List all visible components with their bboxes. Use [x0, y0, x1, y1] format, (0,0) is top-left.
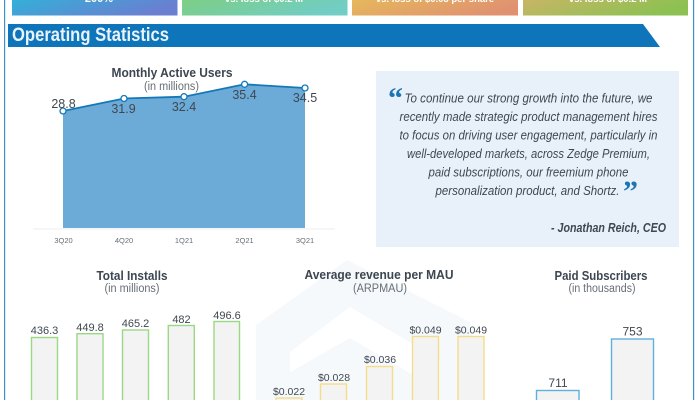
quote text: well-developed markets, across Zedge Premium,: [407, 147, 650, 161]
bars: [32, 322, 240, 400]
chart title: (in millions): [144, 81, 199, 93]
bars: [276, 336, 484, 400]
quote text: To continue our strong growth into the future, we: [404, 92, 653, 106]
data labels: 482: [172, 314, 191, 326]
quote text: to focus on driving user engagement, particularly in: [400, 128, 658, 142]
chart title: (in thousands): [568, 283, 636, 295]
data labels: $0.022: [273, 386, 305, 398]
chart title: (ARPMAU): [353, 283, 407, 295]
watermark logo: [256, 260, 484, 400]
chart title: Monthly Active Users: [112, 65, 232, 80]
card: EPS: [352, 0, 518, 16]
quote text: personalization product, and Shortz.: [435, 184, 620, 198]
data labels: 31.9: [111, 102, 136, 116]
data labels: $0.049: [455, 324, 487, 336]
axis labels: [54, 236, 314, 245]
section banner: Operating Statistics: [8, 24, 660, 47]
chart title: Total Installs: [96, 268, 168, 283]
data labels: 28.8: [51, 97, 76, 111]
axis labels: 1Q21: [175, 236, 193, 245]
icon: closing quote: ”: [623, 175, 638, 208]
axis labels: 3Q21: [296, 236, 314, 245]
data labels: 34.5: [293, 91, 317, 105]
data labels: 436.3: [31, 325, 58, 337]
chart title: [96, 268, 168, 295]
quote text: paid subscriptions, our freemium phone: [428, 166, 629, 180]
data labels: $0.036: [364, 354, 396, 366]
data labels: 711: [548, 376, 568, 390]
card: adjusted EBITDA: [523, 0, 688, 16]
chart title: (in millions): [104, 283, 160, 295]
data labels: 465.2: [122, 318, 149, 330]
chart title: [112, 65, 232, 93]
data labels: 35.4: [232, 88, 257, 102]
data labels: [31, 310, 241, 337]
chart title: Average revenue per MAU: [304, 267, 454, 282]
area and line: [60, 81, 308, 228]
chart: Average revenue per MAU: [273, 267, 487, 400]
data labels: 32.4: [172, 100, 196, 114]
KPI cards: [12, 0, 688, 16]
chart: Total Installs: [31, 268, 241, 400]
chart title: [304, 267, 454, 295]
axis labels: 3Q20: [54, 236, 73, 245]
data labels: 496.6: [213, 310, 241, 322]
chart title: Paid Subscribers: [554, 268, 648, 283]
chart title: [554, 268, 648, 295]
data labels: [51, 88, 317, 116]
chart: Paid Subscribers: [536, 268, 654, 400]
quote text: recently made strategic product management hires: [400, 110, 658, 124]
attribution: - Jonathan Reich, CEO: [551, 220, 666, 235]
data labels: 753: [622, 324, 643, 338]
data labels: $0.049: [409, 324, 442, 336]
data labels: [548, 324, 643, 390]
axis labels: 4Q20: [115, 236, 133, 245]
panel: CEO quote: [376, 71, 679, 247]
card: net income: [182, 0, 348, 16]
data labels: 449.8: [76, 322, 104, 334]
bars: [536, 339, 654, 400]
section banner: Operating Statistics: Operating Statistics: [12, 25, 169, 46]
quote text: [400, 92, 658, 198]
axis labels: 2Q21: [235, 236, 254, 245]
data labels: [273, 324, 487, 398]
data labels: $0.028: [318, 372, 350, 384]
chart: Monthly Active Users: [33, 65, 335, 245]
icon: opening quote: “: [388, 82, 403, 115]
card: revenue: [12, 0, 178, 16]
